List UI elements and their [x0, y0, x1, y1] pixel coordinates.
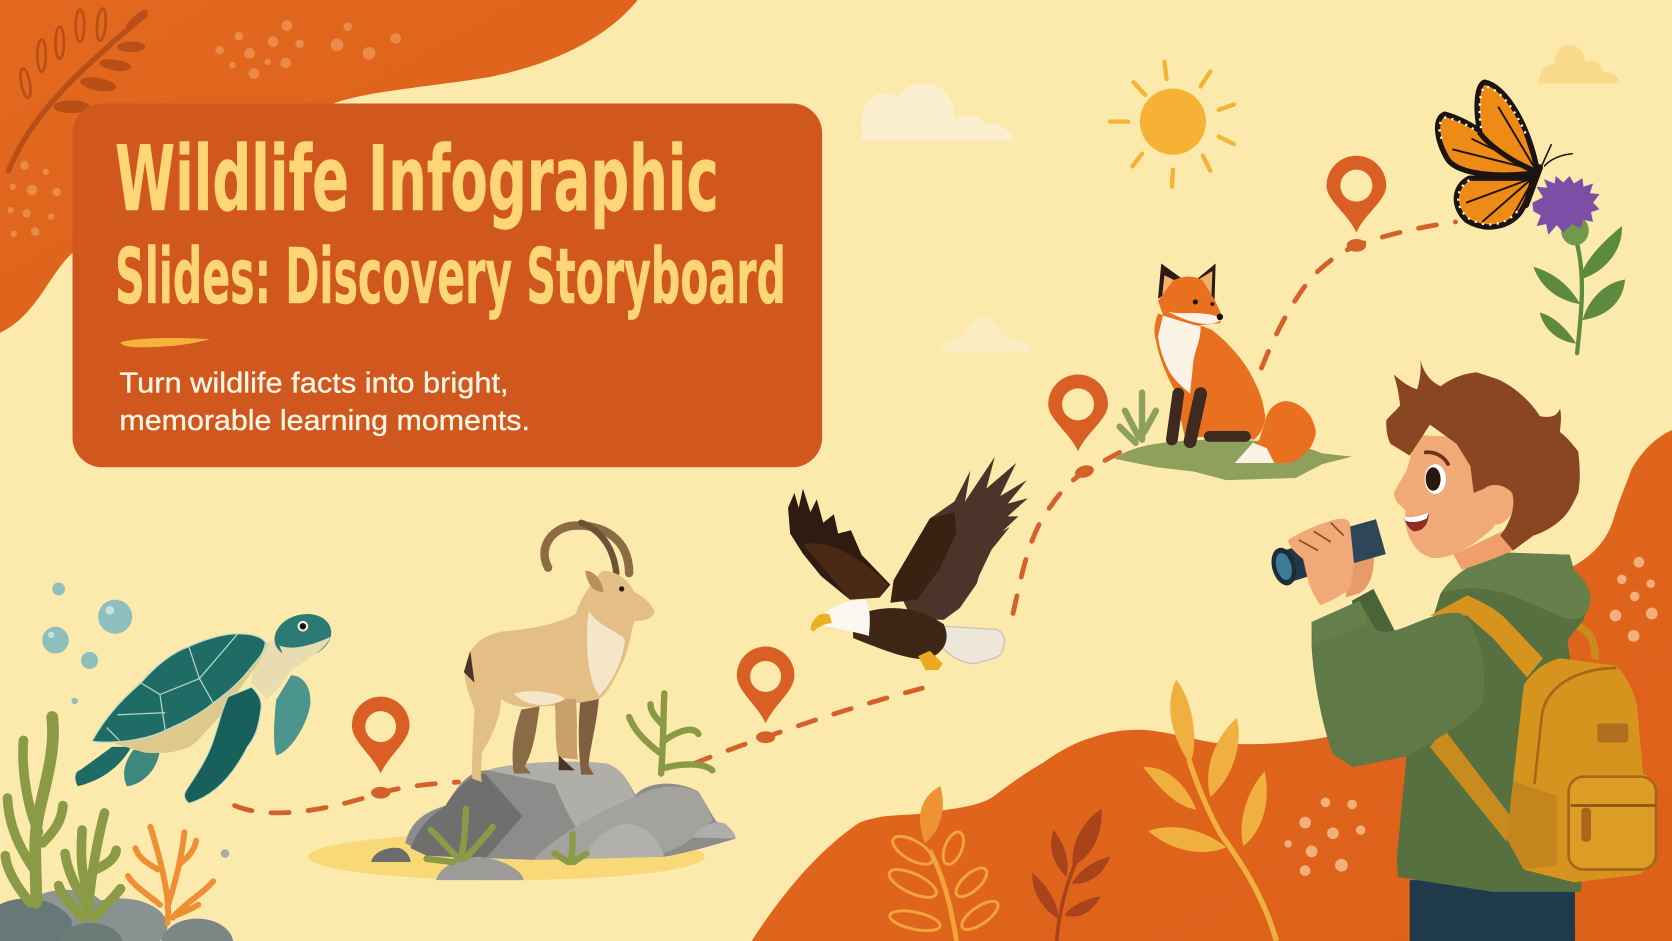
backpack patch [1597, 723, 1628, 743]
illustration: boy explorer [1268, 360, 1656, 941]
fox ears [1158, 264, 1216, 301]
boy ear [1477, 479, 1519, 528]
decor: rocks bottom-left [0, 890, 234, 941]
illustration: sand patch [308, 833, 705, 880]
icon: sun [1110, 62, 1234, 187]
background blob: bottom-right orange [752, 430, 1672, 941]
boy eye [1425, 464, 1446, 494]
illustration: bald eagle [788, 457, 1028, 670]
title: Wildlife Infographic [115, 128, 719, 232]
ibex horns [545, 523, 629, 573]
turtle far flipper [274, 675, 310, 755]
binoculars [1268, 537, 1381, 588]
boy eyebrow [1426, 452, 1448, 464]
backpack upper strap [1430, 595, 1543, 677]
background blob: top-left orange [0, 0, 638, 333]
subtitle [119, 368, 530, 437]
icon: golden leaf sprig [1143, 680, 1276, 941]
backpack front pocket [1569, 777, 1656, 870]
backpack zipper line [1534, 668, 1617, 784]
butterfly body and antennae [1526, 168, 1540, 205]
eagle feet [918, 651, 943, 670]
hoodie body [1397, 553, 1590, 892]
boy near hand [1288, 519, 1354, 605]
eagle tail [938, 626, 1005, 664]
ibex far legs [513, 706, 540, 773]
decor: coral [128, 827, 213, 923]
turtle shell [92, 634, 266, 742]
subtitle: memorable learning moments. [119, 405, 530, 437]
thistle bud [1561, 216, 1589, 245]
eagle head [814, 600, 870, 636]
boy face [1394, 435, 1514, 558]
hoodie hood [1441, 553, 1590, 619]
thistle flower [1532, 176, 1599, 235]
illustration: ibex [464, 523, 655, 782]
cloud: amber top-right [1539, 45, 1620, 83]
small rocks [371, 848, 411, 862]
ibex body [465, 571, 655, 782]
turtle head [270, 608, 336, 664]
eagle body [853, 608, 947, 659]
icon: dark leaf sprig [1032, 809, 1110, 941]
boy far hand [1346, 551, 1374, 597]
cloud: large pale [861, 83, 1013, 141]
turtle front flipper [184, 687, 261, 803]
fox head [1158, 277, 1222, 325]
fox grass [1114, 440, 1352, 480]
illustration: thistle [1532, 176, 1625, 353]
hoodie near arm [1312, 601, 1484, 767]
title: Slides: Discovery Storyboard [115, 233, 786, 322]
butterfly wing spots [1439, 86, 1526, 224]
eagle beak [810, 614, 832, 632]
turtle rear flippers [75, 747, 160, 786]
eagle far wing [788, 489, 890, 600]
sprigs on rock [427, 693, 712, 862]
turtle neck [251, 638, 320, 699]
icon: map pin 4 [1327, 156, 1386, 233]
backpack lower strap [1430, 729, 1510, 842]
route path: dashed trail [235, 222, 1456, 813]
illustration: sea turtle [75, 608, 336, 803]
boy hair [1386, 360, 1580, 551]
title [115, 128, 786, 322]
icon: map pin 1 [352, 697, 409, 773]
illustration: rock outcrop [371, 693, 736, 880]
ibex ear and eye [585, 571, 604, 592]
panel: title card [73, 103, 822, 467]
backpack top handle [1548, 625, 1595, 659]
eagle near wing [894, 457, 1028, 620]
decor: seaweed [5, 717, 120, 918]
boy neck [1453, 528, 1513, 570]
turtle plastron [124, 642, 266, 751]
backpack body [1507, 658, 1656, 882]
decor: bubbles [42, 583, 229, 858]
fox bush [1120, 393, 1156, 443]
illustration: monarch butterfly [1438, 82, 1573, 227]
hoodie far sleeve [1352, 589, 1402, 683]
cloud: small pale [938, 317, 1032, 352]
subtitle: Turn wildlife facts into bright, [119, 368, 509, 400]
backpack side pocket [1507, 781, 1557, 870]
fox body [1154, 314, 1265, 440]
thistle leaves [1533, 226, 1625, 344]
boy pants [1410, 880, 1575, 941]
icon: outlined leaf sprig [886, 788, 1002, 941]
route waypoint dots [371, 239, 1366, 799]
icon: map pin 3 [1048, 374, 1108, 451]
fox tail [1235, 401, 1316, 463]
boy mouth [1403, 512, 1429, 531]
accent brush stroke [120, 338, 210, 347]
illustration: fox [1114, 264, 1352, 480]
icon: map pin 2 [737, 647, 794, 723]
icon: top-left twig [9, 7, 150, 171]
fox chest [1158, 314, 1201, 394]
ibex chest [587, 611, 625, 696]
fox legs [1172, 394, 1245, 442]
